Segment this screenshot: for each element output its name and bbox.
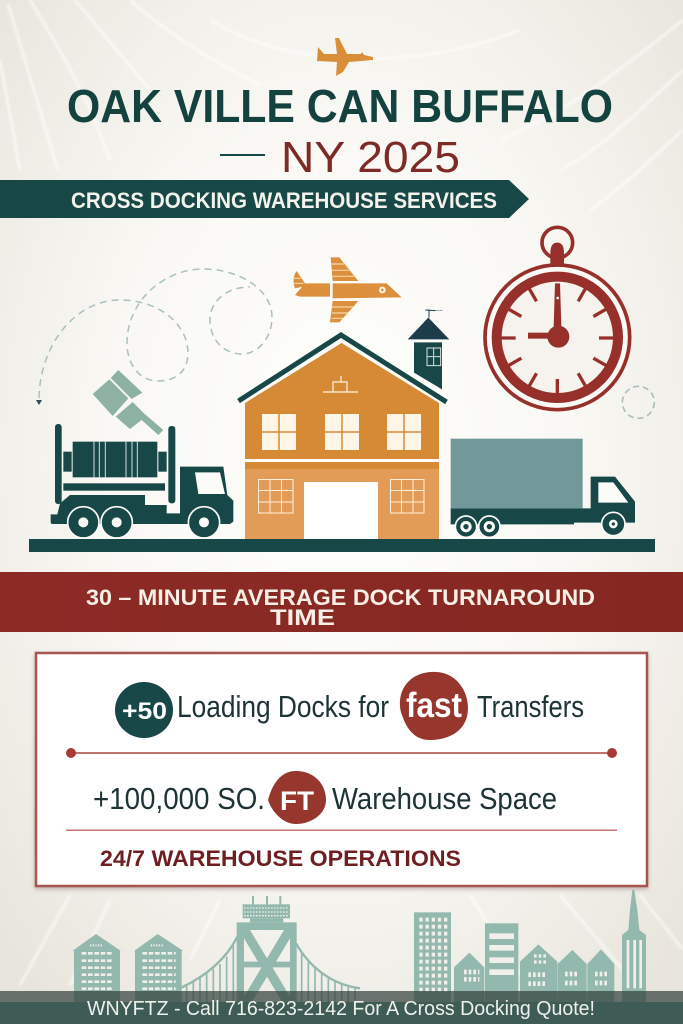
- delivery truck: [451, 439, 635, 537]
- cab window: [195, 472, 225, 494]
- stat: loading docks: Loading Docks for: [177, 689, 389, 724]
- subtitle: NY 2025: NY 2025: [281, 133, 460, 182]
- stat: loading docks: Transfers: [477, 689, 584, 724]
- truck body: [51, 424, 233, 524]
- stat: warehouse space: FT: [280, 786, 315, 816]
- banner: cross docking warehouse services: [0, 180, 529, 218]
- dashed circle: [622, 386, 654, 418]
- warehouse tower, clock, and delivery truck: [408, 227, 654, 537]
- skyline: left buildings and bridge: [72, 896, 360, 1024]
- left apartment blocks: [72, 934, 183, 1023]
- banner: cross docking warehouse services: CROSS DOCKING WAREHOUSE SERVICES: [71, 188, 497, 213]
- stat: warehouse space: +100,000 SO.: [93, 781, 265, 816]
- loaded truck with crate: [51, 370, 233, 538]
- large plane: [293, 257, 402, 322]
- upper windows: [262, 414, 421, 450]
- red band: dock turnaround: TIME: [270, 605, 335, 630]
- bridge: [180, 896, 360, 1024]
- roof: [238, 335, 446, 402]
- footer bar: [0, 991, 683, 1024]
- lower windows: [258, 480, 424, 513]
- stat: loading docks: [115, 672, 584, 740]
- stat: warehouse space: Warehouse Space: [332, 781, 557, 816]
- red band: dock turnaround: [0, 572, 683, 632]
- wheels: [68, 507, 220, 538]
- red band: dock turnaround: 30 – MINUTE AVERAGE DOCK TURNAROUND: [86, 585, 595, 610]
- icon: small plane: [317, 38, 373, 76]
- attic icon: [323, 376, 358, 392]
- title: OAK VILLE CAN BUFFALO: [67, 80, 613, 132]
- stat: warehouse space: [93, 771, 557, 824]
- stopwatch: [485, 227, 630, 410]
- ground line: [29, 539, 655, 552]
- panel: warehouse stats: [36, 653, 647, 886]
- footer bar: WNYFTZ - Call 716-823-2142 For A Cross Docking Quote!: [87, 998, 595, 1020]
- divider with dots: [66, 748, 617, 758]
- skyline: right buildings: [414, 890, 646, 1024]
- tower: [408, 309, 449, 389]
- crate being lifted: [93, 370, 163, 435]
- warehouse building: [238, 335, 446, 539]
- stat: loading docks: fast: [406, 686, 462, 725]
- stat: 24/7 operations: 24/7 WAREHOUSE OPERATIONS: [100, 846, 461, 871]
- stat: loading docks: +50: [122, 698, 167, 725]
- dashed flight path with arrow: [36, 269, 272, 405]
- door: [304, 482, 378, 539]
